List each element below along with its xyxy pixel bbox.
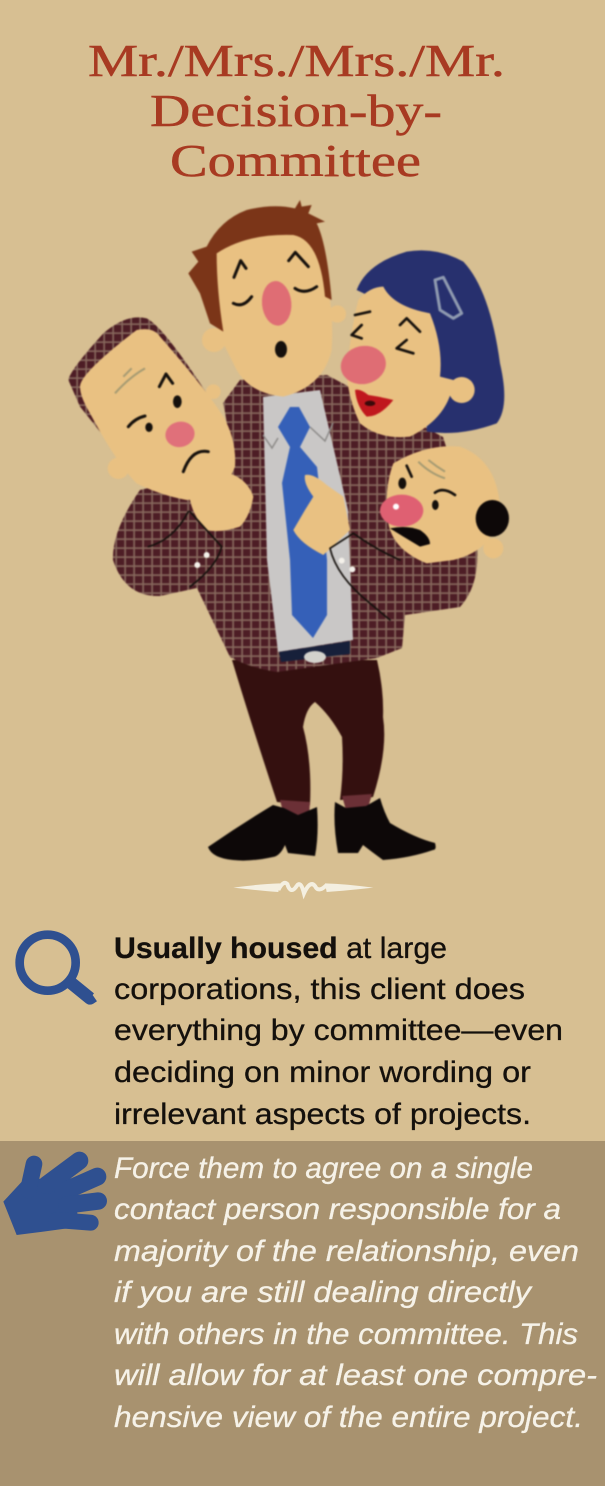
description text: corporations, this client does	[114, 973, 525, 1006]
title: Committee	[170, 135, 421, 186]
main head	[188, 200, 346, 397]
advice text: hensive view of the entire project.	[114, 1401, 583, 1434]
advice text: majority of the relationship, even	[114, 1235, 579, 1268]
advice text: if you are still dealing directly	[114, 1276, 533, 1309]
left fist	[190, 472, 253, 531]
main head face	[216, 235, 332, 397]
description text	[114, 932, 563, 1131]
title: Decision-by-	[150, 85, 442, 136]
woman face	[347, 287, 453, 437]
main head ears	[202, 305, 346, 352]
title	[88, 35, 505, 186]
advice text: with others in the committee. This	[114, 1318, 578, 1351]
left head ears	[108, 384, 221, 479]
belt	[279, 641, 350, 662]
illustration: man with four heads	[68, 200, 509, 861]
bald head	[380, 446, 509, 563]
tie	[278, 407, 327, 638]
woman features	[337, 277, 462, 417]
left head features	[115, 368, 208, 472]
advice text: will allow for at least one compre-	[114, 1359, 597, 1392]
ornament divider	[233, 883, 373, 893]
description text: everything by committee—even	[114, 1014, 563, 1047]
jacket	[113, 375, 477, 672]
collar lines	[263, 423, 333, 448]
main head hair	[188, 200, 332, 332]
main head features	[233, 252, 317, 358]
description text: Usually housed at large	[114, 932, 447, 965]
bald head ear	[483, 538, 503, 558]
trousers	[232, 660, 384, 805]
title: Mr./Mrs./Mrs./Mr.	[88, 35, 505, 86]
belt buckle	[304, 651, 326, 663]
right hand	[293, 475, 350, 555]
shoes	[208, 798, 436, 861]
socks	[280, 794, 372, 816]
description text: irrelevant aspects of projects.	[114, 1098, 531, 1131]
icon: hand	[3, 1161, 98, 1235]
description text: deciding on minor wording or	[114, 1056, 531, 1089]
advice text: contact person responsible for a	[114, 1193, 561, 1226]
left head hair	[68, 317, 207, 457]
bald head face	[387, 446, 500, 563]
icon: magnifying glass	[20, 935, 93, 998]
left head face	[80, 329, 235, 500]
left head	[68, 317, 235, 500]
woman head	[337, 250, 504, 437]
advice text: Force them to agree on a single	[114, 1152, 533, 1185]
sleeve seams and buttons	[148, 512, 400, 620]
panel: advice	[0, 1141, 605, 1486]
woman hair	[357, 250, 504, 433]
shirt	[263, 390, 353, 652]
woman ear	[449, 377, 475, 403]
bald head features	[380, 460, 509, 547]
advice text	[114, 1152, 597, 1434]
